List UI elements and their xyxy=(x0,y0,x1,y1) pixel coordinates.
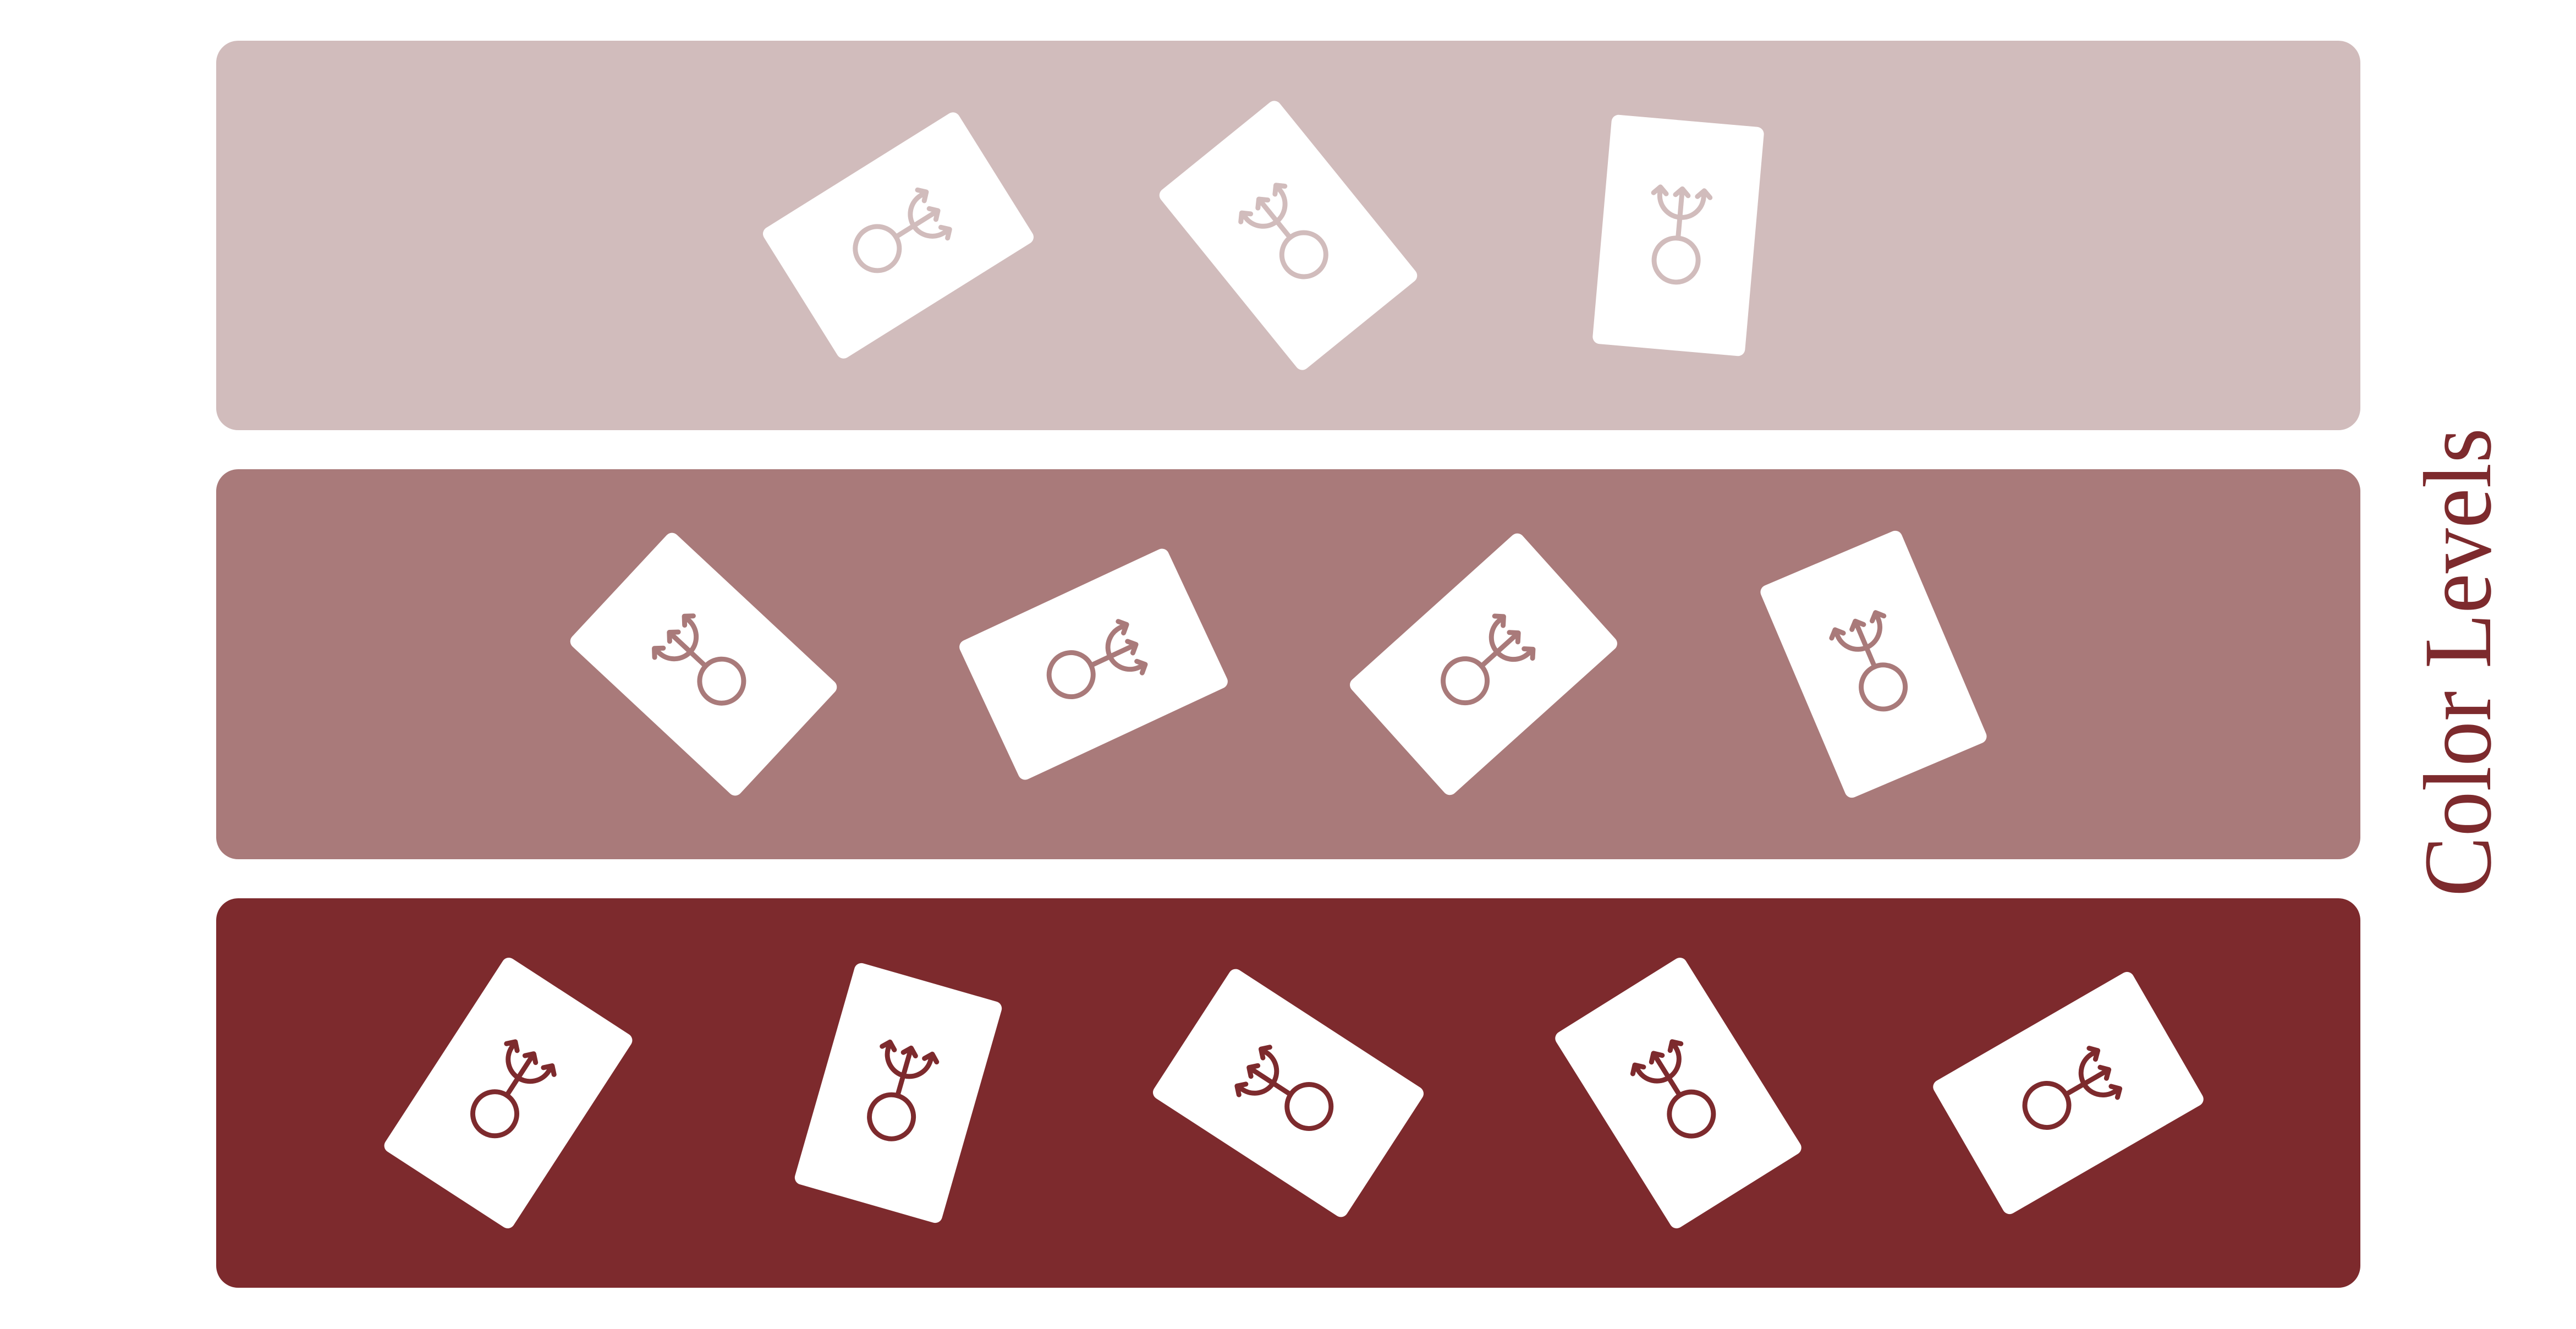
card: dark 2 xyxy=(793,962,1003,1224)
card: dark 1 xyxy=(382,955,635,1231)
card: medium 3 xyxy=(1347,530,1620,798)
card: light 1 xyxy=(760,109,1036,361)
card: medium 4 xyxy=(1758,529,1989,800)
card: dark 5 xyxy=(1931,969,2206,1217)
heading: Color Levels: Color Levels xyxy=(2404,428,2512,897)
card: dark 4 xyxy=(1552,955,1804,1231)
panel: dark color level xyxy=(216,898,2360,1288)
card: light 2 xyxy=(1156,98,1420,373)
card: medium 2 xyxy=(957,546,1230,782)
panel: medium color level xyxy=(216,469,2360,859)
card: dark 3 xyxy=(1150,966,1426,1220)
card: medium 1 xyxy=(567,530,840,799)
card: light 3 xyxy=(1592,114,1765,356)
panel: light color level xyxy=(216,41,2360,430)
